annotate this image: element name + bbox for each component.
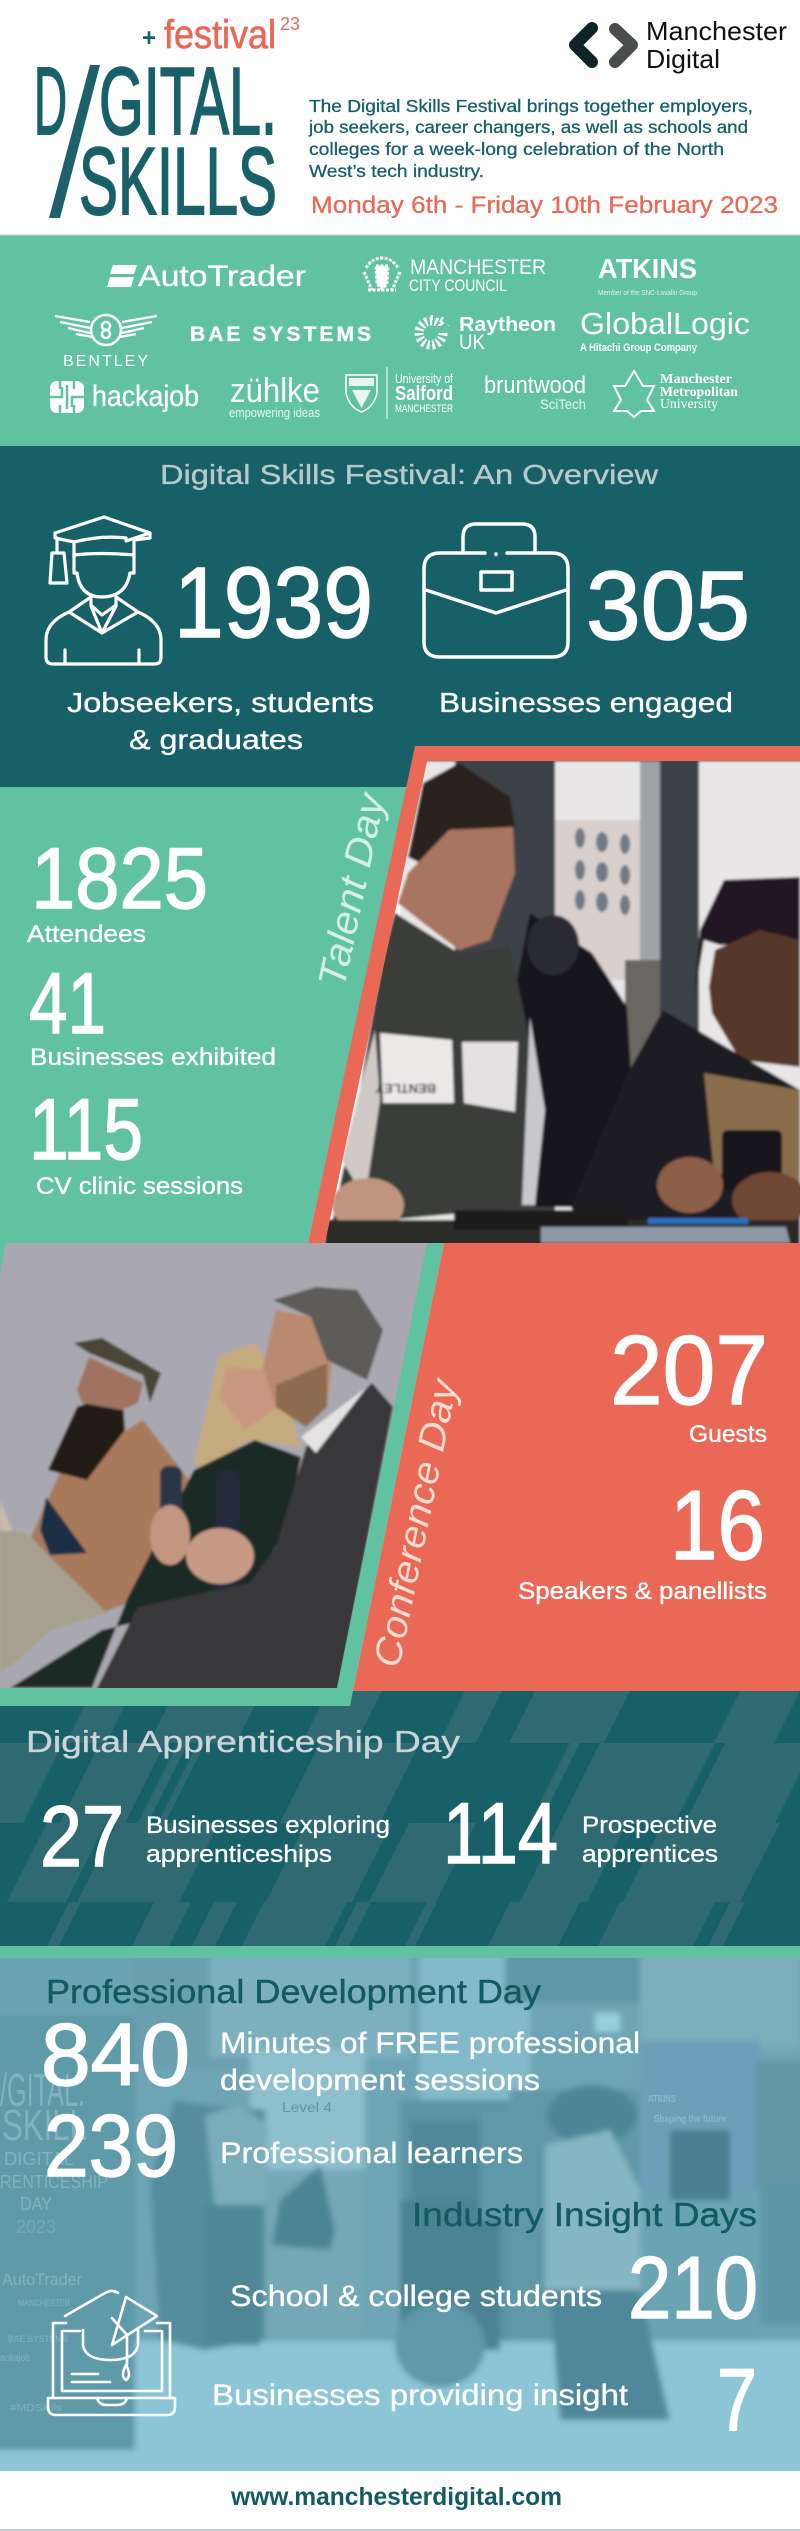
icon: laptop with graduation cap [48, 2291, 175, 2415]
logo: GlobalLogic: GlobalLogic [580, 306, 750, 341]
logo: University of Salford [346, 367, 453, 419]
intro paragraph: The Digital Skills Festival brings together employers, [309, 96, 753, 116]
overview heading: Digital Skills Festival: An Overview [160, 459, 659, 490]
logo: Manchester Metropolitan University: University [660, 397, 718, 412]
logo: hackajob [50, 380, 199, 413]
stat: 115 CV clinic sessions [29, 1082, 243, 1200]
logo: hackajob: hackajob [92, 380, 199, 413]
festival tag: festival [164, 13, 276, 57]
logo: Atkins: ATKINS [598, 253, 697, 284]
intro paragraph: West’s tech industry. [309, 161, 484, 181]
stat: 16 speakers and panellists [518, 1470, 767, 1605]
logo: Manchester City Council: CITY COUNCIL [409, 276, 507, 295]
logo: University of Salford: MANCHESTER [395, 403, 453, 415]
faint event banner wording in photo: Shaping the future [654, 2114, 726, 2125]
stat: 16 speakers and panellists: Speakers & panellists [518, 1578, 767, 1605]
icon: briefcase [424, 524, 568, 657]
label: businesses exploring apprenticeships [146, 1812, 390, 1868]
photo: talent day attendees: BENTLEY [375, 1081, 436, 1096]
label: prospective apprentices: Prospective [582, 1812, 717, 1839]
logo: Bruntwood SciTech [484, 372, 586, 412]
logo: BAE Systems: BAE SYSTEMS [190, 323, 371, 346]
photo: festival crowd [0, 1948, 800, 2481]
heading: industry insight days: Industry Insight Days [412, 2196, 757, 2233]
panel: header [0, 0, 800, 235]
label: jobseekers: Jobseekers, students [67, 687, 374, 718]
title: Digital Skills logo: GITAL. [99, 48, 277, 155]
label: Talent Day: Talent Day [311, 788, 394, 991]
label: prospective apprentices [582, 1812, 718, 1868]
faint event banner wording in photo: MANCHESTER [18, 2298, 70, 2308]
stat: 114: 114 [443, 1786, 558, 1882]
stat: 1825 attendees: 1825 [31, 831, 208, 927]
stat: 239: 239 [44, 2096, 178, 2195]
festival tag: + [142, 24, 156, 52]
faint event banner wording in photo: ATKINS [648, 2094, 676, 2105]
logo: Atkins [598, 253, 697, 297]
panel: apprenticeship day [0, 1691, 800, 1946]
stat: 41 businesses exhibited [29, 956, 276, 1071]
icon: graduate [46, 517, 161, 664]
intro paragraph: colleges for a week-long celebration of the North [309, 139, 724, 159]
heading: professional development day: Professional Development Day [46, 1973, 542, 2010]
faint event banner wording in photo: RENTICESHIP [0, 2172, 108, 2192]
label: jobseekers: & graduates [129, 724, 303, 755]
logo: Raytheon UK [419, 314, 556, 354]
stat: 1825 attendees: Attendees [27, 921, 146, 948]
panel: conference day [0, 1233, 800, 1706]
coral frame [308, 746, 800, 1243]
logo: Atkins: Member of the SNC-Lavalin Group [598, 288, 697, 297]
stat: 115 CV clinic sessions: 115 [29, 1082, 143, 1178]
faint event banner wording in photo: SKILL [2, 2101, 87, 2150]
title: Digital Skills logo: SKILLS [79, 128, 277, 235]
logo: Bentley: BENTLEY [63, 353, 148, 370]
panel: overview [0, 446, 800, 787]
logo: AutoTrader: AutoTrader [138, 260, 306, 293]
footer [0, 2471, 800, 2531]
logo: Zuhlke: zühlke [230, 372, 320, 410]
stat: 1939: 1939 [174, 547, 373, 659]
logo: University of Salford: University of [395, 371, 453, 386]
stat: 207 guests: Guests [689, 1421, 767, 1448]
faint event banner wording in photo: BAE SYSTEMS [8, 2334, 68, 2344]
logo: Bruntwood SciTech: bruntwood [484, 372, 586, 399]
logo: Manchester Metropolitan University: Manchester [660, 372, 732, 387]
label: businesses exploring apprenticeships: apprenticeships [146, 1841, 332, 1868]
logo: University of Salford: Salford [395, 383, 453, 405]
logo: Bentley [55, 315, 157, 370]
faint event banner wording in photo: 2023 [16, 2217, 56, 2237]
title: Digital Skills logo: D [34, 48, 67, 155]
stat: 305: 305 [586, 551, 750, 660]
label: school and college students: School & college students [230, 2280, 602, 2313]
logo: Manchester Digital [575, 16, 787, 74]
logo: Zuhlke: empowering ideas [229, 406, 320, 420]
stat: 41 businesses exhibited: Businesses exhibited [30, 1044, 276, 1071]
website link: www.manchesterdigital.com [230, 2483, 562, 2511]
stat: 16 speakers and panellists: 16 [670, 1470, 765, 1580]
label: Conference Day: Conference Day [367, 1374, 466, 1671]
intro paragraph [308, 96, 753, 181]
logo: Raytheon UK: UK [459, 331, 485, 354]
faint event banner wording in photo: Level 4 [282, 2099, 332, 2115]
title: Digital Skills logo [34, 48, 277, 235]
panel: professional development and insight days [0, 1946, 800, 2481]
festival tag: 23 [280, 14, 300, 34]
photo: talent day attendees [325, 761, 800, 1261]
stat: 210: 210 [628, 2238, 758, 2337]
logo: Manchester Metropolitan University: Metropolitan [660, 385, 738, 400]
label: minutes of free sessions: development sessions [220, 2064, 540, 2097]
logo: Manchester Digital: Digital [646, 44, 720, 74]
date: Monday 6th - Friday 10th February 2023 [311, 192, 778, 219]
photo: conference panellists [0, 1233, 440, 1698]
label: prospective apprentices: apprentices [582, 1841, 718, 1868]
label: businesses providing insight: Businesses providing insight [212, 2379, 629, 2412]
intro paragraph: job seekers, career changers, as well as schools and [308, 117, 748, 137]
apprenticeship heading: Digital Apprenticeship Day [26, 1724, 461, 1759]
logo: Manchester City Council: MANCHESTER [410, 256, 546, 279]
sliver of green at photo corner [0, 1243, 6, 1275]
faint event banner wording in photo: ackajob [0, 2353, 30, 2364]
faint event banner wording in photo: DAY [20, 2194, 52, 2214]
faint event banner wording in photo: AutoTrader [2, 2270, 82, 2289]
stat: 41 businesses exhibited: 41 [29, 956, 106, 1052]
stat: 27: 27 [40, 1789, 124, 1885]
logo: GlobalLogic: A Hitachi Group Company [580, 342, 698, 354]
label: businesses engaged: Businesses engaged [439, 687, 733, 718]
faint event banner wording in photo: /GITAL. [0, 2064, 85, 2116]
faint event banner wording in photo: DIGITAL [4, 2149, 74, 2169]
logo: Manchester City Council [364, 256, 546, 295]
faint event banner wording in photo: #MDSkills [10, 2403, 62, 2414]
logo: Raytheon UK: Raytheon [459, 314, 556, 336]
logo: Manchester Metropolitan University [614, 371, 738, 417]
faint event banner wording in photo [0, 2064, 726, 2414]
logo: Bruntwood SciTech: SciTech [540, 396, 586, 412]
logo: Manchester Digital: Manchester [646, 16, 787, 46]
label: minutes of free sessions: Minutes of FREE professional [220, 2027, 640, 2060]
label: jobseekers [67, 687, 374, 755]
panel: partner logos [0, 234, 800, 446]
stat: 840: 840 [41, 2005, 190, 2104]
stat: 115 CV clinic sessions: CV clinic sessions [36, 1173, 243, 1200]
label: professional learners: Professional learners [220, 2137, 523, 2170]
label: businesses exploring apprenticeships: Businesses exploring [146, 1812, 390, 1839]
panel: talent day [0, 746, 800, 1261]
stat: 207 guests: 207 [610, 1315, 768, 1425]
label: minutes of free sessions [220, 2027, 640, 2097]
stat: 7: 7 [717, 2350, 757, 2449]
